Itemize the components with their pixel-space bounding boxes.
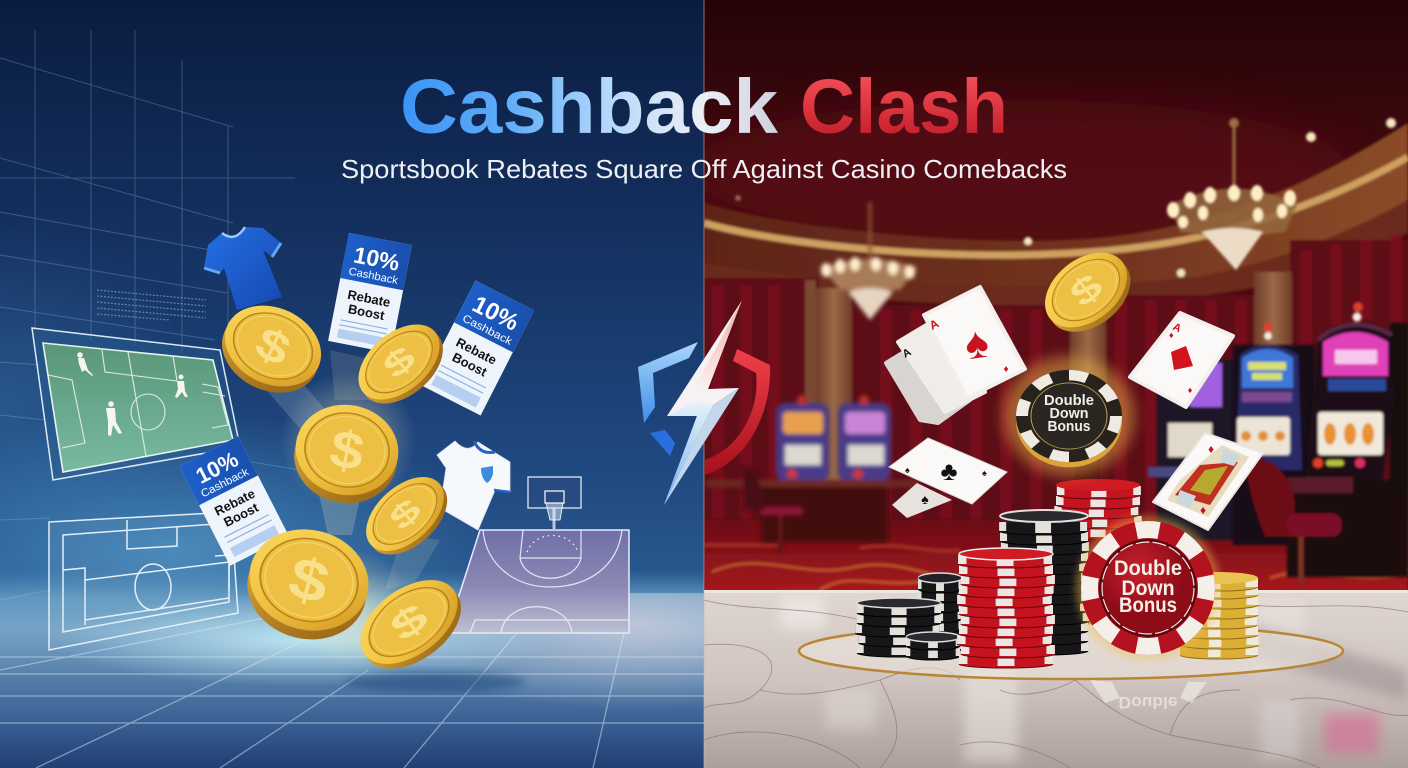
coin: top left: $ bbox=[248, 317, 298, 375]
playing card: ace of clubs with lower card bbox=[889, 438, 1007, 518]
panel: sportsbook side bbox=[0, 0, 704, 768]
chandelier: right bbox=[1167, 118, 1297, 270]
playing cards: fan of aces bbox=[886, 287, 1025, 423]
playing cards: fan of aces: ♠ bbox=[962, 318, 992, 369]
coupon: 10% cashback rebate boost, left: Cashback bbox=[199, 466, 251, 500]
coupon: 10% cashback rebate boost, left: Boost bbox=[221, 499, 261, 530]
coin: center: $ bbox=[326, 418, 368, 482]
slot machine: pink bbox=[1287, 302, 1408, 577]
coin: bottom right: $ bbox=[382, 595, 436, 650]
coupon: 10% cashback rebate boost, top: Boost bbox=[347, 301, 386, 323]
floating black chip: Double Down Bonus: Bonus bbox=[1048, 418, 1090, 435]
icon: blue jersey bbox=[204, 227, 282, 310]
icon: white jersey bbox=[437, 441, 510, 530]
coin: casino bbox=[1031, 237, 1145, 347]
panel: casino side bbox=[690, 0, 1408, 768]
playing card: ace of diamonds: ♦ bbox=[1169, 330, 1174, 340]
floating black chip: Double Down Bonus: Down bbox=[1050, 405, 1088, 422]
floating black chip: Double Down Bonus: Double bbox=[1044, 392, 1094, 409]
coin: top right: $ bbox=[375, 338, 423, 386]
coupon: 10% cashback rebate boost, right: Boost bbox=[450, 349, 490, 380]
coin: top left bbox=[222, 306, 322, 393]
chandelier: left bbox=[821, 202, 917, 320]
large red chip: Double Down Bonus: Double bbox=[1114, 557, 1182, 580]
coupon: 10% cashback rebate boost, right bbox=[422, 280, 534, 416]
chip stack: red front bbox=[957, 548, 1055, 668]
large red chip: Double Down Bonus: Down bbox=[1122, 577, 1174, 600]
coin: lower right: $ bbox=[382, 491, 428, 537]
data readout lines bbox=[97, 290, 206, 320]
coupon: 10% cashback rebate boost, right: Rebate bbox=[454, 335, 499, 368]
large red chip: Double Down Bonus bbox=[1076, 516, 1220, 660]
coupon: 10% cashback rebate boost, right: 10% bbox=[468, 291, 523, 337]
light rays bbox=[262, 350, 440, 670]
playing card: ace of clubs with lower card: ♠ bbox=[921, 491, 929, 507]
casino chair bbox=[1243, 458, 1342, 583]
coin: lower right bbox=[366, 477, 448, 555]
coin shadow on floor bbox=[345, 672, 525, 692]
playing card: ace of clubs with lower card: ♣ bbox=[940, 456, 958, 486]
coupon: 10% cashback rebate boost, left bbox=[179, 436, 289, 566]
playing card: jack of diamonds: ♦ bbox=[1208, 442, 1214, 456]
casino table with distant slot machines bbox=[706, 395, 918, 553]
large red chip: Double Down Bonus: Bonus bbox=[1119, 594, 1177, 617]
playing cards: fan of aces: A bbox=[927, 316, 941, 333]
coin: casino: $ bbox=[1062, 265, 1110, 315]
coupon: 10% cashback rebate boost, top: Cashback bbox=[348, 266, 399, 287]
center divider bbox=[703, 0, 705, 768]
marble floor bbox=[704, 590, 1408, 768]
playing card: jack of diamonds: ♦ bbox=[1200, 503, 1206, 517]
coin: large bottom: $ bbox=[282, 544, 336, 616]
playing card: ace of diamonds: A bbox=[1171, 321, 1183, 335]
icon: shield with lightning bolt bbox=[638, 301, 770, 505]
playing cards: fan of aces: A bbox=[900, 346, 913, 361]
slot machine: purple bbox=[1146, 358, 1234, 542]
playing card: jack of diamonds bbox=[1153, 433, 1263, 530]
coupon: 10% cashback rebate boost, left: 10% bbox=[192, 446, 242, 489]
reflection of red chip: Double bbox=[1118, 693, 1178, 712]
title: Clash bbox=[800, 64, 1008, 150]
chip stack: black short bbox=[855, 598, 943, 657]
chip stack: black low front bbox=[906, 632, 960, 660]
coupon: 10% cashback rebate boost, right: Cashback bbox=[460, 313, 514, 348]
basketball court bbox=[447, 477, 629, 633]
coin: bottom right bbox=[360, 580, 461, 669]
coin: center bbox=[294, 404, 398, 504]
coupon: 10% cashback rebate boost, top bbox=[328, 233, 412, 353]
casino ceiling and walls bbox=[704, 118, 1408, 523]
subtitle: Sportsbook Rebates Square Off Against Casino Comebacks bbox=[341, 154, 1067, 184]
gold display ring bbox=[799, 623, 1343, 679]
coupon: 10% cashback rebate boost, left: Rebate bbox=[212, 486, 257, 519]
coin: large bottom bbox=[247, 529, 368, 640]
playing card: ace of diamonds bbox=[1130, 313, 1233, 407]
coupon: 10% cashback rebate boost, top: Rebate bbox=[346, 287, 392, 310]
wireframe grid bbox=[0, 30, 300, 600]
carpet bbox=[704, 520, 1408, 593]
playing card: ace of diamonds: ♦ bbox=[1188, 385, 1193, 395]
chip stack: back red bbox=[1054, 479, 1142, 539]
coupon: 10% cashback rebate boost, top: 10% bbox=[352, 241, 402, 276]
floating black chip: Double Down Bonus bbox=[1003, 356, 1135, 476]
reflection of red chip bbox=[1090, 680, 1207, 712]
title: Cashback bbox=[400, 64, 778, 150]
soccer field outline bbox=[49, 512, 238, 650]
floor grid bbox=[0, 618, 704, 768]
chip stack: black tall bbox=[998, 510, 1090, 655]
chip stack: black left bbox=[917, 573, 963, 653]
playing card: ace of clubs with lower card: ♠ bbox=[982, 468, 987, 478]
playing cards: fan of aces: ♦ bbox=[1003, 364, 1009, 375]
slot machine: blue bbox=[1233, 322, 1315, 545]
icon: green soccer pitch bbox=[32, 328, 240, 480]
coin: top right bbox=[358, 324, 443, 404]
title bbox=[400, 64, 1008, 150]
playing card: ace of clubs with lower card: ♠ bbox=[905, 465, 910, 475]
chip stack: gold bbox=[1179, 572, 1259, 659]
